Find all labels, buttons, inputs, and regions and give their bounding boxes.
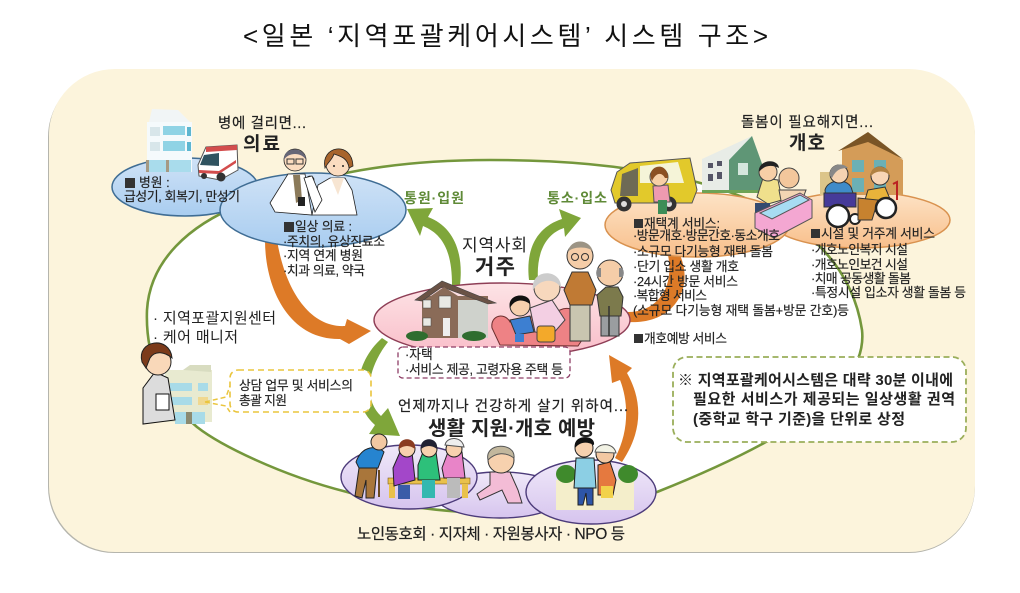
icon: house (406, 281, 496, 341)
home care text: ·복합형 서비스 (633, 288, 707, 303)
icon: seated seniors (393, 438, 465, 499)
icon: man in wheelchair (824, 165, 860, 227)
daily medical text: ·주치의, 유상진료소 (283, 234, 385, 249)
support center text (153, 310, 276, 346)
hospital text: 병원 : (139, 175, 170, 190)
icon: bath helper (755, 161, 806, 213)
panel: long-term care (605, 132, 966, 318)
consultation text box (230, 370, 371, 412)
icon: green house (702, 136, 765, 193)
facility care text (811, 226, 966, 300)
daily medical text: 일상 의료 : (295, 219, 352, 234)
daily medical text: ·지역 연계 병원 (283, 248, 363, 263)
heading: medical: 의료 (243, 133, 280, 155)
home text box: ·서비스 제공, 고령자용 주택 등 (405, 362, 563, 377)
daily medical text: ·치과 의료, 약국 (283, 263, 365, 278)
arrow: commute to medical (407, 208, 461, 285)
ellipse: hospital (112, 158, 258, 216)
heading: long-term care: 돌봄이 필요해지면... (741, 114, 873, 131)
home care text: ·단기 입소 생활 개호 (633, 259, 739, 274)
icon: helper and senior (574, 437, 616, 505)
label: commute to facility: 통소·입소 (547, 190, 607, 206)
home care text: 재택계 서비스: (644, 216, 720, 231)
home text box: ·자택 (405, 347, 433, 362)
icon: caregiver by van (650, 167, 670, 214)
panel: daily medical (220, 149, 406, 278)
facility care text: ·특정시설 입소자 생활 돌봄 등 (811, 285, 966, 300)
icon: hospital building (146, 109, 192, 172)
heading: community living: 지역사회 (462, 236, 527, 255)
icon: woman in wheelchair (858, 167, 897, 220)
home care text: ·방문개호·방문간호·동소개호 (633, 228, 780, 243)
heading: prevention (398, 398, 628, 440)
panel: prevention ellipses (341, 434, 656, 524)
title: <일본 ‘지역포괄케어시스템’ 시스템 구조> (243, 21, 768, 51)
heading: long-term care (741, 114, 873, 154)
heading: prevention: 언제까지나 건강하게 살기 위하여... (398, 398, 628, 415)
home care text: (소규모 다기능형 재택 돌봄+방문 간호)등 (633, 303, 849, 318)
organisations label: 노인동호회 · 지자체 · 자원봉사자 · NPO 등 (357, 525, 625, 543)
icon: family on sofa (492, 273, 583, 346)
icon: care manager (141, 343, 175, 424)
facility care text: ·치매 공동생활 돌봄 (811, 271, 911, 286)
panel: home (374, 242, 630, 378)
community boundary loop (147, 160, 862, 513)
icon: center building (165, 365, 212, 424)
icon: standing grandfather (564, 242, 596, 341)
icon: grandfather with cane (597, 260, 623, 336)
icon: stretching woman (477, 446, 522, 503)
facility care text: 시설 및 거주계 서비스 (821, 226, 935, 241)
consultation text box: 상담 업무 및 서비스의 (239, 378, 353, 393)
icon: bench (388, 478, 470, 498)
ellipse: walking (526, 460, 656, 524)
ellipse: home (374, 283, 630, 357)
heading: community living: 거주 (475, 256, 515, 279)
icon: pink bathtub (755, 193, 812, 238)
callout: service area note (673, 357, 966, 442)
heading: long-term care: 개호 (789, 132, 825, 154)
facility care text: ·개호노인보건 시설 (811, 257, 908, 272)
panel: community support center (141, 310, 371, 424)
heading: medical: 병에 걸리면... (218, 115, 306, 132)
callout: service area note: (중학교 학구 기준)을 단위로 상정 (693, 411, 905, 428)
ellipse: home care (605, 193, 789, 257)
daily medical text (283, 219, 385, 278)
icon: female doctor (304, 149, 357, 215)
support center text: · 케어 매니저 (153, 329, 238, 346)
callout: service area note: ※ 지역포괄케어시스템은 대략 30분 이내에 (678, 372, 953, 389)
home care text: ·소규모 다기능형 재택 돌봄 (633, 244, 773, 259)
home text box (398, 347, 570, 378)
background panel (48, 69, 975, 553)
heading: prevention: 생활 지원·개호 예방 (428, 417, 595, 440)
callout: service area note: 필요한 서비스가 제공되는 일상생활 권역 (693, 391, 955, 408)
arrow: care to home (628, 255, 685, 322)
icon: elderly man with cane (355, 434, 387, 498)
hospital text (124, 175, 240, 204)
hospital text: 급성기, 회복기, 만성기 (124, 189, 240, 204)
home care text: ·24시간 방문 서비스 (633, 274, 738, 289)
prevention service label: 개호예방 서비스 (644, 331, 727, 346)
arrow: home to prevention (359, 338, 400, 436)
home care text (633, 216, 849, 318)
consultation text box: 총괄 지원 (239, 393, 287, 408)
heading: community living (462, 236, 527, 279)
ellipse: stretching (435, 472, 565, 518)
label: commute to hospital: 통원·입원 (404, 190, 464, 206)
ellipse: facility care (770, 192, 950, 248)
heading: medical (218, 115, 306, 155)
ellipse: daily medical (220, 173, 406, 247)
support center text: · 지역포괄지원센터 (153, 310, 276, 327)
icon: garden scene (556, 465, 638, 510)
ellipse: seniors club (341, 445, 477, 509)
icon: brown care home (820, 132, 903, 195)
arrow: prevention to home (609, 355, 638, 462)
connector: center to box (205, 386, 230, 412)
icon: yellow care van (611, 158, 697, 212)
arrow: commute to care (528, 209, 581, 280)
icon: ambulance (198, 145, 238, 182)
panel: hospital (112, 109, 258, 216)
icon: male doctor (270, 149, 314, 215)
facility care text: ·개호노인복지 시설 (811, 242, 908, 257)
arrow: medical to home (265, 240, 371, 344)
